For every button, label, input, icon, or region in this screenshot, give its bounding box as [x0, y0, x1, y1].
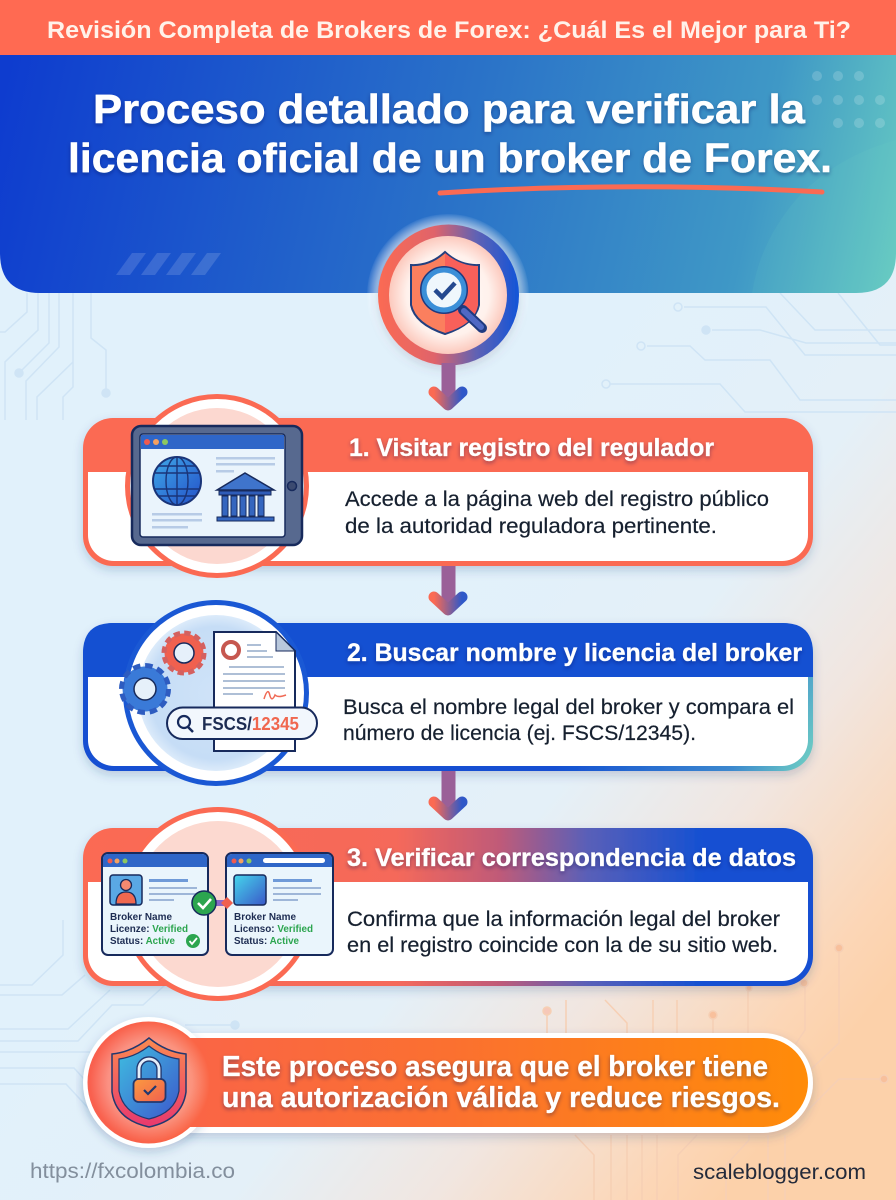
step 3 description: Confirma que la información legal del broker	[347, 908, 780, 931]
dot pattern	[812, 71, 885, 128]
step 3 description: en el registro coincide con la de su sitio web.	[347, 934, 778, 957]
window: left: Broker Name	[110, 912, 172, 923]
title: licencia oficial de un broker de Forex.	[68, 135, 832, 181]
main shield icon	[367, 214, 529, 376]
arrow: shield to step 1	[434, 363, 462, 405]
window: left	[102, 853, 208, 955]
step 2 heading: 2. Buscar nombre y licencia del broker	[347, 639, 802, 667]
window: left: Licenze: Verified	[110, 924, 188, 935]
panel: step 3	[83, 807, 813, 1001]
shield lock icon	[112, 1038, 186, 1127]
circuit pattern	[0, 293, 896, 1200]
step 3 heading: 3. Verificar correspondencia de datos	[347, 844, 796, 872]
connector with check badge	[192, 891, 233, 915]
top banner: Revisión Completa de Brokers de Forex: ¿Cuál Es el Mejor para Ti?	[47, 17, 851, 44]
step 1 illustration	[125, 394, 309, 578]
step 2 description: número de licencia (ej. FSCS/12345).	[343, 722, 696, 745]
title: Proceso detallado para verificar la	[93, 86, 806, 132]
step 1 description: de la autoridad reguladora pertinente.	[345, 515, 717, 538]
slash marks	[116, 253, 221, 275]
callout text	[222, 1051, 780, 1114]
step 3 description	[347, 908, 780, 957]
step 1 description	[345, 488, 769, 538]
callout text: Este proceso asegura que el broker tiene	[222, 1051, 768, 1083]
closing callout	[83, 1017, 813, 1148]
title	[68, 86, 832, 181]
search pill: FSCS/12345	[202, 714, 299, 734]
footer: source url: https://fxcolombia.co	[30, 1160, 235, 1183]
step 1 heading: 1. Visitar registro del regulador	[349, 434, 714, 462]
arrow: step 2 to step 3	[434, 771, 462, 815]
footer: credit: scaleblogger.com	[693, 1161, 866, 1184]
window: right	[226, 853, 333, 955]
top banner	[0, 0, 896, 56]
search pill	[167, 708, 317, 739]
step 1 description: Accede a la página web del registro público	[345, 488, 769, 511]
header panel	[0, 55, 896, 293]
arrow: step 1 to step 2	[434, 566, 462, 610]
panel: step 2	[83, 600, 813, 786]
decorative teal swoosh	[752, 140, 896, 293]
gear: coral	[164, 633, 204, 673]
step 2 description	[343, 696, 794, 745]
window: right: Licenso: Verified	[234, 924, 313, 935]
step 3 illustration	[102, 807, 333, 1001]
callout text: una autorización válida y reduce riesgos.	[222, 1082, 780, 1114]
step 2 description: Busca el nombre legal del broker y compara el	[343, 696, 794, 719]
window: right: Broker Name	[234, 912, 296, 923]
window: right: Status: Active	[234, 936, 299, 947]
gear: blue	[122, 666, 168, 712]
panel: step 1	[83, 394, 813, 578]
title underline	[440, 187, 822, 193]
step 2 illustration	[122, 600, 317, 786]
window: left: Status: Active	[110, 936, 175, 947]
